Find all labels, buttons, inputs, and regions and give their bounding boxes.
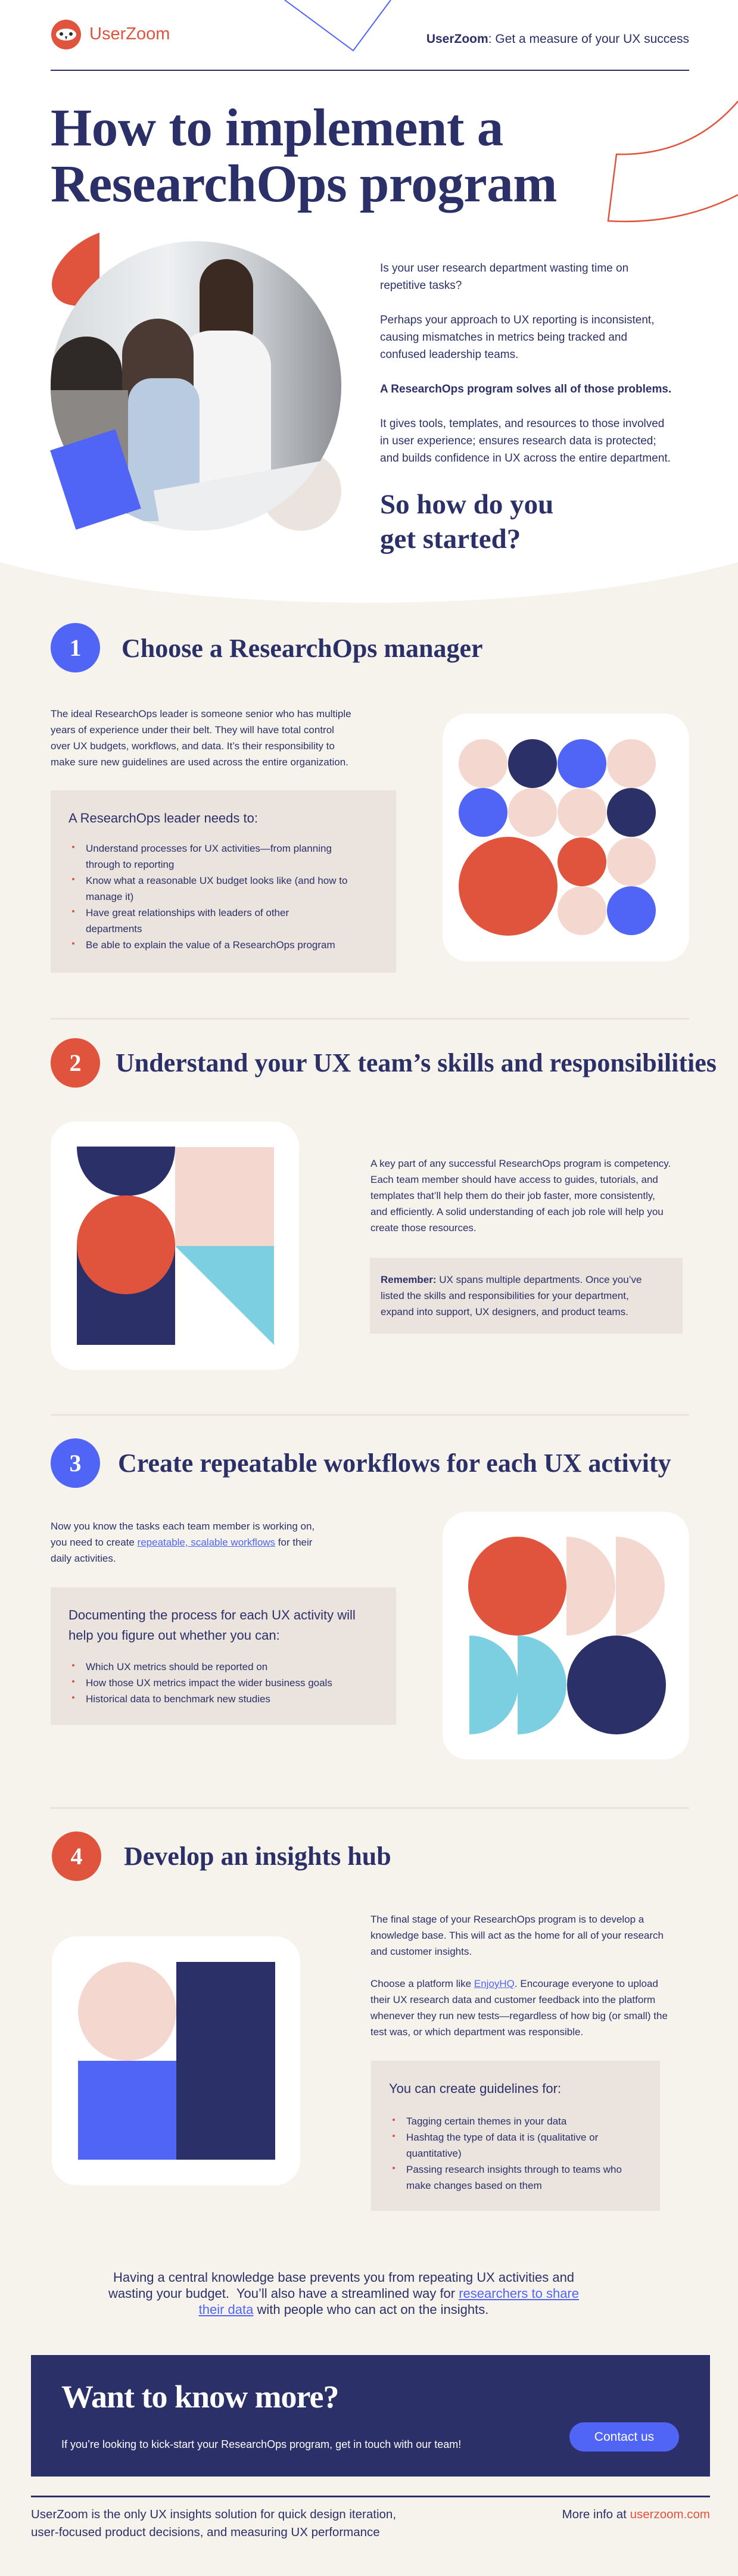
- text 4: Choose a platform like EnjoyHQ. Encourage everyone to upload: [370, 1978, 658, 1989]
- intro text: repetitive tasks?: [380, 279, 462, 292]
- title: How to implement a: [51, 99, 503, 157]
- text 1: years of experience under their belt. They will have total control: [51, 724, 334, 736]
- box 4: [371, 2061, 660, 2211]
- footer: user-focused product decisions, and measuring UX performance: [31, 2525, 380, 2539]
- text 3: daily activities.: [51, 1553, 116, 1564]
- box 1: through to reporting: [86, 859, 174, 870]
- box 3: help you figure out whether you can:: [68, 1628, 280, 1643]
- text 4: their UX research data and customer feedback into the platform: [370, 1994, 655, 2005]
- intro text: and builds confidence in UX across the entire department.: [380, 452, 671, 465]
- intro text: Perhaps your approach to UX reporting is inconsistent,: [380, 314, 654, 326]
- text 3: Now you know the tasks each team member is working on,: [51, 1521, 314, 1532]
- box 1: departments: [86, 923, 142, 935]
- text 1: The ideal ResearchOps leader is someone senior who has multiple: [51, 708, 351, 719]
- card: shapes 2: [51, 1122, 299, 1370]
- number 4: [52, 1831, 101, 1881]
- logo: UserZoom: [89, 24, 170, 43]
- box 4: Tagging certain themes in your data: [406, 2116, 566, 2127]
- box 1: Have great relationships with leaders of other: [86, 907, 289, 918]
- number 3: 3: [69, 1450, 81, 1477]
- closing text: their data with people who can act on the insights.: [199, 2302, 488, 2317]
- text 4: whenever they run new tests—regardless of how big (or small) the: [370, 2010, 668, 2021]
- number 1: [51, 623, 100, 672]
- closing text: wasting your budget. You’ll also have a streamlined way for researchers to share: [108, 2286, 579, 2301]
- so how do you get started: get started?: [380, 524, 521, 555]
- number 2: 2: [69, 1049, 81, 1076]
- box 4: make changes based on them: [406, 2180, 542, 2191]
- text 4: [370, 1914, 668, 2038]
- text 4: and customer insights.: [370, 1946, 472, 1957]
- CTA panel: [31, 2355, 710, 2477]
- text 2: Each team member should have access to guides, tutorials, and: [370, 1174, 658, 1185]
- so how do you get started: [380, 489, 553, 555]
- card: circles: [443, 714, 689, 961]
- intro text: It gives tools, templates, and resources to those involved: [380, 418, 664, 430]
- footer: UserZoom is the only UX insights solution for quick design iteration,: [31, 2508, 396, 2521]
- box 1: Know what a reasonable UX budget looks like (and how to: [86, 875, 347, 886]
- intro text: in user experience; ensures research data is protected;: [380, 435, 656, 447]
- heading 3: Create repeatable workflows for each UX activity: [118, 1449, 671, 1478]
- section 3: [51, 1438, 689, 1759]
- box 1: manage it): [86, 891, 133, 902]
- so how do you get started: So how do you: [380, 489, 553, 520]
- box 3: Which UX metrics should be reported on: [86, 1661, 267, 1672]
- contact button: [569, 2422, 679, 2452]
- box 1: [51, 790, 396, 973]
- text 2: and efficiently. A solid understanding of each job role will help you: [370, 1206, 664, 1217]
- card: shapes 3: [443, 1512, 689, 1759]
- text 2: A key part of any successful ResearchOps program is competency.: [370, 1158, 671, 1169]
- heading 4: Develop an insights hub: [124, 1842, 391, 1871]
- footer: [31, 2508, 396, 2539]
- box 4: Passing research insights through to teams who: [406, 2164, 622, 2175]
- text 3: you need to create repeatable, scalable workflows for their: [51, 1537, 312, 1548]
- photo illustration: [50, 232, 341, 531]
- contact button: Contact us: [594, 2430, 654, 2444]
- box 4: You can create guidelines for:: [389, 2081, 561, 2096]
- box 3: How those UX metrics impact the wider business goals: [86, 1677, 332, 1689]
- title: [51, 99, 557, 213]
- text: More info at userzoom.com: [562, 2508, 710, 2521]
- header tagline: UserZoom: Get a measure of your UX success: [426, 32, 689, 46]
- logo: [51, 20, 170, 49]
- intro text: [380, 262, 671, 465]
- CTA panel: Want to know more?: [61, 2379, 339, 2415]
- remember box: listed the skills and responsibilities for your department,: [381, 1290, 629, 1301]
- number 1: 1: [69, 634, 81, 661]
- section 4: [52, 1831, 668, 2211]
- intro text: causing mismatches in metrics being tracked and: [380, 331, 627, 344]
- box 3: [51, 1587, 396, 1725]
- intro text: Is your user research department wasting time on: [380, 262, 628, 275]
- text 1: make sure new guidelines are used across the entire organization.: [51, 756, 348, 768]
- remember box: expand into support, UX designers, and product teams.: [381, 1306, 628, 1317]
- hero white background: [0, 0, 738, 603]
- text 4: The final stage of your ResearchOps program is to develop a: [370, 1914, 644, 1925]
- number 3: [51, 1438, 100, 1488]
- title: ResearchOps program: [51, 155, 557, 213]
- section 1: [51, 623, 689, 973]
- box 4: Hashtag the type of data it is (qualitative or: [406, 2132, 598, 2143]
- text 4: test was, or which department was responsible.: [370, 2026, 583, 2038]
- closing text: [108, 2270, 579, 2317]
- text 2: create those resources.: [370, 1222, 477, 1234]
- box 1: Understand processes for UX activities—from planning: [86, 843, 332, 854]
- box 1: A ResearchOps leader needs to:: [68, 811, 258, 826]
- box 4: quantitative): [406, 2148, 462, 2159]
- CTA panel: If you’re looking to kick-start your ResearchOps program, get in touch with our team!: [61, 2438, 461, 2450]
- decorative lines: [285, 0, 738, 223]
- box 1: Be able to explain the value of a ResearchOps program: [86, 939, 335, 951]
- card: shapes 4: [52, 1936, 300, 2185]
- closing text: Having a central knowledge base prevents you from repeating UX activities and: [113, 2270, 574, 2285]
- text 1: [51, 708, 351, 768]
- box 3: Documenting the process for each UX activity will: [68, 1608, 356, 1622]
- text 2: [370, 1158, 671, 1234]
- box 3: Historical data to benchmark new studies: [86, 1693, 270, 1705]
- intro text: confused leadership teams.: [380, 348, 518, 361]
- text 2: templates that’ll help them do their job faster, more consistently,: [370, 1190, 655, 1201]
- text 1: over UX budgets, workflows, and data. It’s their responsibility to: [51, 740, 335, 752]
- heading 1: Choose a ResearchOps manager: [122, 634, 483, 663]
- heading 2: Understand your UX team’s skills and responsibilities: [116, 1048, 717, 1077]
- remember box: Remember: UX spans multiple departments. Once you’ve: [381, 1274, 642, 1285]
- intro text: A ResearchOps program solves all of those problems.: [380, 383, 671, 395]
- text 4: knowledge base. This will act as the home for all of your research: [370, 1930, 664, 1941]
- number 2: [51, 1038, 100, 1088]
- number 4: 4: [70, 1843, 82, 1870]
- section 2: [51, 1038, 717, 1370]
- remember box: [370, 1258, 683, 1334]
- text 3: [51, 1521, 314, 1564]
